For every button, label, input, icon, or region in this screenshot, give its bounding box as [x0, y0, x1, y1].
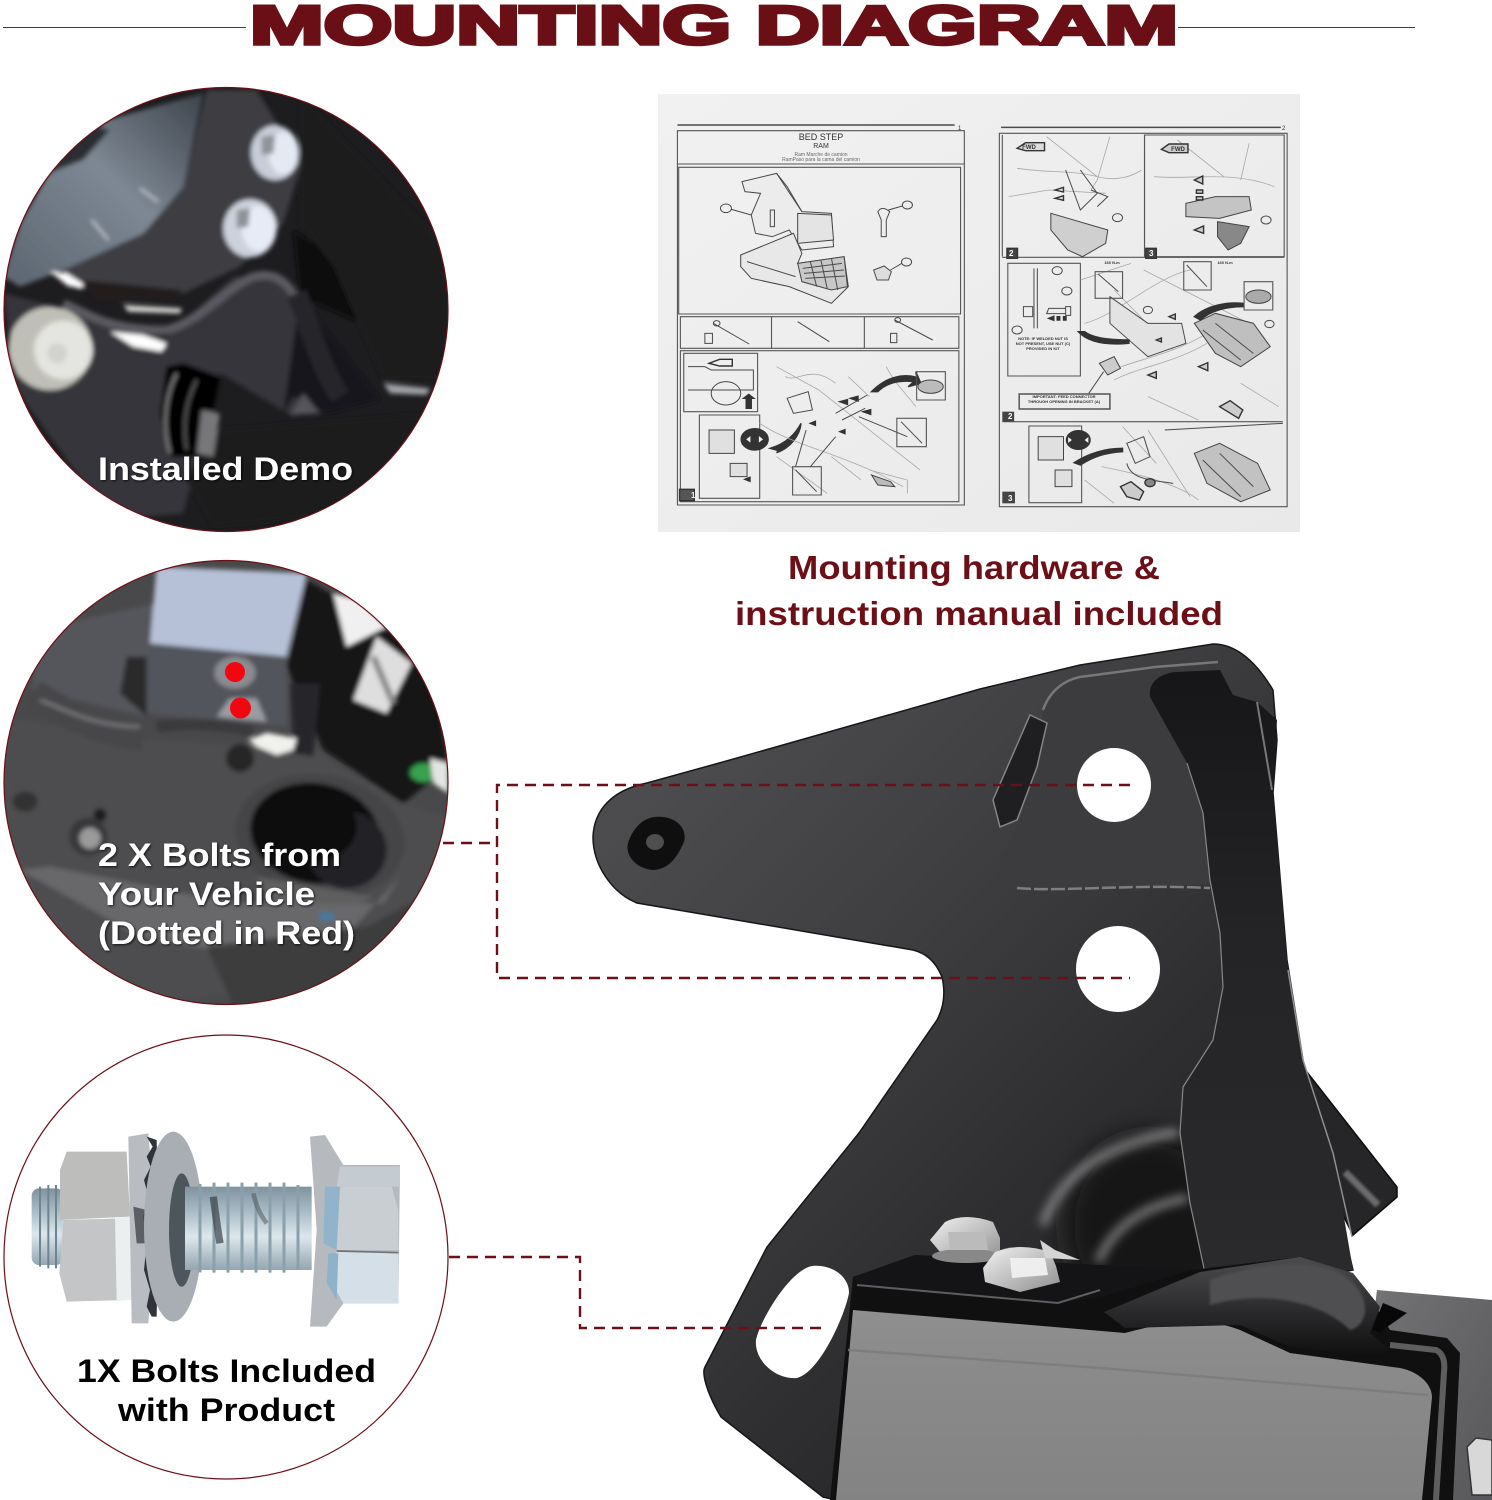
right page step 3: [1029, 426, 1082, 503]
panel: installed demo photo circle: [0, 85, 452, 535]
photo: vehicle frame: [3, 567, 448, 1007]
label: included bolts: with Product: [117, 1392, 335, 1428]
manual text: RamPaso para la cama del camion: [782, 157, 860, 163]
label: vehicle bolts: 2 X Bolts from: [98, 837, 341, 873]
manual text: FWD: [1022, 145, 1036, 151]
slotted hole: [756, 1266, 849, 1378]
manual text: NOTE: IF WELDED NUT IS: [1018, 336, 1068, 341]
icon: bolt washer: [214, 657, 256, 689]
icon: upper red dot: [225, 662, 245, 682]
nut: [59, 1133, 157, 1323]
label: vehicle bolts: [98, 837, 355, 951]
step 1 scene: [760, 367, 920, 493]
vertical strap: [1150, 670, 1353, 1273]
arrow: upper bracket connector: [443, 785, 1130, 978]
label: included bolts: 1X Bolts Included: [77, 1353, 376, 1389]
tool row: [705, 320, 933, 344]
top plate: [853, 1255, 1191, 1303]
square tube face: [836, 1310, 1432, 1500]
manual text: 2: [1282, 126, 1286, 132]
manual text: BED STEP: [799, 132, 843, 142]
body embossed arcs: [1043, 1132, 1188, 1262]
manual caption: [735, 549, 1223, 632]
label: included bolts: [77, 1353, 376, 1428]
manual text: NOT PRESENT, USE NUT (C): [1016, 341, 1071, 346]
manual caption: Mounting hardware &: [788, 549, 1160, 586]
manual text: 3: [1149, 249, 1154, 258]
manual text: 3: [1008, 494, 1013, 503]
panel: instruction manual: [658, 94, 1300, 632]
bolt head: [310, 1135, 400, 1327]
photo: installed bracket: [3, 90, 447, 527]
icon: upper bolt: [251, 125, 299, 180]
right page step 2: [1008, 263, 1080, 376]
side bolt: [1467, 1438, 1492, 1495]
icon: lower bolt: [8, 307, 93, 390]
gusset bracket: [1104, 1257, 1407, 1357]
manual text: 160 N.m: [1104, 260, 1120, 265]
manual text: 2: [1008, 412, 1013, 421]
bolt heads: [930, 1217, 1080, 1292]
body shaded hollow: [1065, 1135, 1235, 1315]
illustration: bolt assembly: [32, 1132, 400, 1327]
label: vehicle bolts: Your Vehicle: [98, 876, 315, 912]
panel: vehicle bolts photo circle: [0, 558, 452, 1008]
panel: included bolt circle: [4, 1035, 448, 1479]
weld seam: [1017, 887, 1210, 889]
part drawing: [742, 173, 834, 250]
manual text: THROUGH OPENING IN BRACKET (A): [1028, 399, 1101, 404]
step 1 insets: [684, 353, 758, 412]
right page top scenes: [1009, 137, 1142, 197]
manual text: [691, 126, 1286, 503]
tube collar band: [1390, 1345, 1444, 1500]
label: installed demo: Installed Demo: [98, 451, 353, 487]
manual text: IMPORTANT: FEED CONNECTOR: [1033, 394, 1096, 399]
manual text: Ram Marche de camion: [794, 152, 848, 158]
dark backing: [830, 1255, 1460, 1500]
left rivet hole: [627, 817, 685, 870]
threaded shaft: [185, 1183, 312, 1273]
manual text: PROVIDED IN KIT: [1026, 346, 1060, 351]
bracket side flange: [1303, 1067, 1397, 1235]
flat washer: [144, 1132, 203, 1322]
icon: lower red dot: [230, 698, 251, 718]
bracket main plate: [593, 644, 1353, 1500]
manual line art: [677, 125, 1287, 507]
manual caption: instruction manual included: [735, 595, 1223, 632]
mounting hole upper: [1077, 748, 1151, 822]
label: vehicle bolts: (Dotted in Red): [98, 915, 355, 951]
manual text: 160 N.m: [1217, 260, 1233, 265]
manual text: RAM: [813, 143, 829, 150]
mounting hole lower: [1076, 926, 1160, 1012]
manual text: 2: [1009, 249, 1014, 258]
icon: middle bolt: [223, 199, 277, 257]
raised weld plate: [1001, 660, 1220, 888]
serrated washer: [143, 1137, 158, 1317]
manual text: 1: [691, 491, 696, 500]
manual text: 1: [958, 126, 962, 132]
weld dimple: [993, 715, 1047, 827]
manual text: FWD: [1171, 147, 1185, 153]
bolt shaft end: [32, 1185, 63, 1268]
square tube side face: [1370, 1290, 1492, 1500]
arrow: lower bolt connector: [449, 1257, 822, 1328]
product: bed step bracket: [593, 644, 1492, 1500]
